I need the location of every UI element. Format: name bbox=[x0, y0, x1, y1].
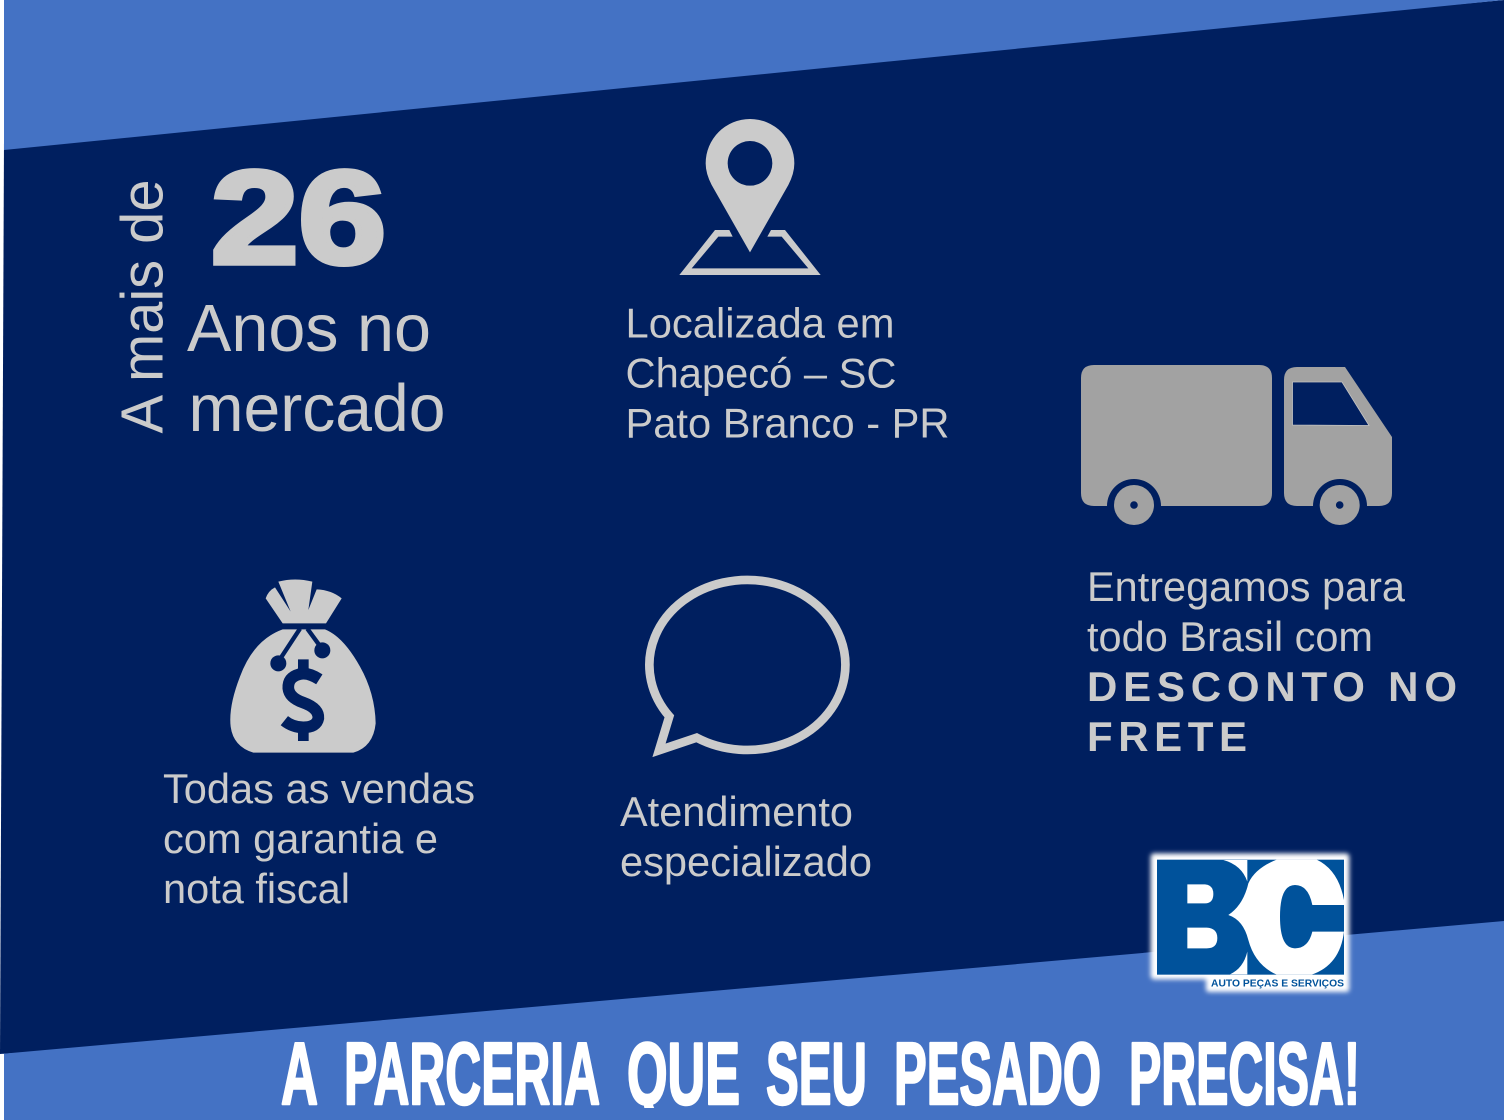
text: Anos no mercado: mercado bbox=[188, 371, 446, 446]
text: warranty: com garantia e bbox=[163, 815, 438, 862]
logo: BC Auto Peças e Serviços bbox=[1151, 853, 1349, 992]
text: Anos no mercado bbox=[187, 291, 446, 446]
text: location: Chapecó – SC bbox=[626, 350, 896, 396]
slogan bbox=[282, 1041, 1356, 1108]
panel: location bbox=[626, 119, 950, 446]
text: service: especializado bbox=[620, 838, 872, 885]
text: delivery: Entregamos para bbox=[1087, 563, 1406, 610]
text: service: Atendimento bbox=[620, 788, 853, 835]
panel: 26 years in the market bbox=[110, 144, 446, 446]
text: delivery: DESCONTO NO bbox=[1087, 663, 1457, 710]
text: delivery bbox=[1087, 563, 1457, 760]
bottom blue diagonal band bbox=[0, 921, 1504, 1120]
text: warranty: Todas as vendas bbox=[163, 765, 475, 812]
text: delivery: FRETE bbox=[1087, 713, 1247, 760]
icon: speech bubble bbox=[649, 580, 845, 750]
text: location: Localizada em bbox=[626, 300, 894, 346]
rotated text: A mais de: A mais de bbox=[110, 180, 176, 434]
panel: warranty bbox=[163, 579, 475, 912]
text: location bbox=[626, 300, 950, 446]
text: service bbox=[620, 788, 872, 885]
logo: BC Auto Peças e Serviços: AUTO PEÇAS E SERVIÇOS bbox=[1211, 978, 1344, 990]
text: delivery: todo Brasil com bbox=[1087, 613, 1373, 660]
text: warranty: nota fiscal bbox=[163, 865, 350, 912]
top blue diagonal band bbox=[4, 0, 1504, 150]
panel: delivery bbox=[1081, 365, 1457, 760]
text: Anos no mercado: Anos no bbox=[187, 291, 431, 366]
text: warranty bbox=[163, 765, 475, 912]
icon: truck bbox=[1081, 365, 1392, 525]
icon: money bag bbox=[230, 579, 376, 753]
text: location: Pato Branco - PR bbox=[626, 400, 950, 446]
big number 26: 26 bbox=[211, 144, 386, 291]
panel: service bbox=[620, 580, 872, 885]
icon: map pin bbox=[679, 119, 821, 275]
